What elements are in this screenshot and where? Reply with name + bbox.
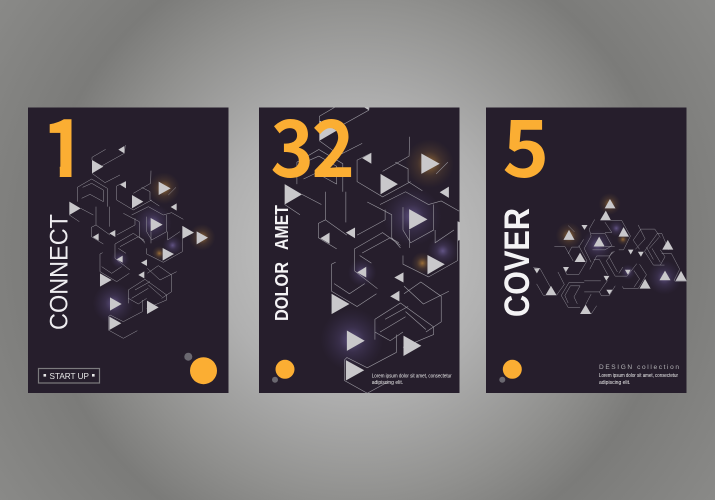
orange dot <box>276 360 294 379</box>
orange dot <box>190 357 217 384</box>
DESIGN collection heading: DESIGN collection <box>599 364 679 371</box>
vertical title COVER: COVER <box>498 208 537 317</box>
grey dot <box>184 353 192 361</box>
caption text <box>599 373 678 386</box>
panel 2 background <box>259 108 460 393</box>
panel 3 background <box>486 108 686 393</box>
panel 1 hexagon network with triangles <box>69 145 215 338</box>
big number 32 <box>270 86 355 200</box>
big number 32: 2 <box>312 86 355 200</box>
vertical title CONNECT: CONNECT <box>46 214 74 330</box>
panel 3 hexagon network with triangles <box>533 193 694 314</box>
caption text <box>372 374 452 386</box>
caption text: Lorem ipsum dolor sit amet, consectetur <box>372 374 452 380</box>
grey dot <box>499 377 505 383</box>
orange dot <box>503 360 522 379</box>
panel: cover 3 COVER <box>486 108 686 393</box>
caption text: adipiscing elit. <box>599 380 630 386</box>
vertical title DOLOR AMET: AMET <box>271 204 292 250</box>
panel: cover 1 CONNECT <box>28 85 228 393</box>
big number 1: 1 <box>42 85 89 200</box>
panel 1 background <box>28 108 228 393</box>
panel 2 hexagon network with triangles <box>284 108 460 393</box>
vertical title DOLOR AMET <box>271 204 292 321</box>
big number 32: 3 <box>270 86 314 200</box>
vertical title DOLOR AMET: DOLOR <box>271 262 292 321</box>
START UP badge: START UP <box>50 371 89 381</box>
grey dot <box>272 377 278 383</box>
caption text: Lorem ipsum dolor sit amet, consectetur <box>599 373 678 379</box>
panel: cover 2 DOLOR AMET <box>259 108 460 393</box>
big number 5: 5 <box>502 85 549 200</box>
caption text: adipiscing elit. <box>372 380 403 386</box>
START UP badge <box>38 368 100 383</box>
